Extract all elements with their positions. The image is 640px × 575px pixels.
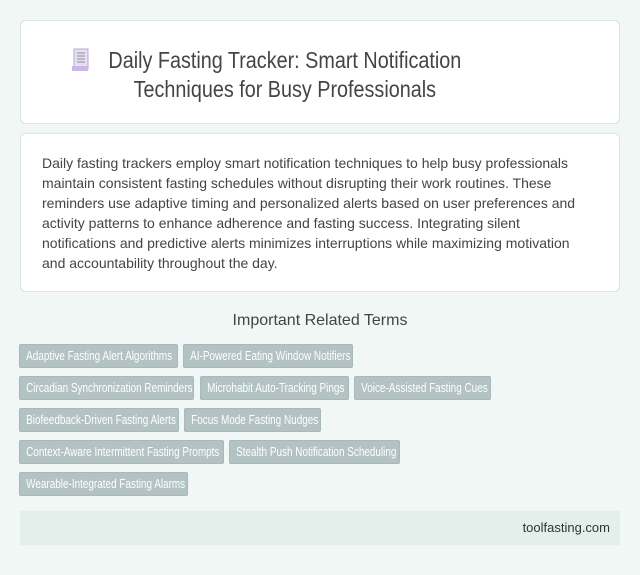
- tag: Circadian Synchronization Reminders: [26, 380, 193, 395]
- description text: notifications and predictive alerts minimizes interruptions while maximizing motivation: [42, 235, 570, 251]
- tag: [183, 344, 353, 368]
- header card: [20, 20, 620, 124]
- tag: Microhabit Auto-Tracking Pings: [207, 380, 344, 395]
- tag: [19, 440, 224, 464]
- title: Daily Fasting Tracker: Smart Notification: [108, 47, 461, 73]
- tag: [19, 344, 178, 368]
- footer text: toolfasting.com: [523, 520, 610, 535]
- icon: document: [72, 48, 88, 71]
- tag: [19, 408, 179, 432]
- tag: Biofeedback-Driven Fasting Alerts: [26, 412, 176, 427]
- description text: [42, 155, 575, 271]
- tag: [200, 376, 349, 400]
- description text: maintain consistent fasting schedules without disrupting their work routines. These: [42, 175, 551, 191]
- tag: Wearable-Integrated Fasting Alarms: [26, 476, 185, 491]
- description card: [20, 133, 620, 292]
- tag: Voice-Assisted Fasting Cues: [361, 380, 488, 395]
- tag: [19, 472, 188, 496]
- description text: activity patterns to enhance adherence and fasting success. Integrating silent: [42, 215, 520, 231]
- description text: reminders use adaptive timing and personalized alerts based on user preferences and: [42, 195, 575, 211]
- title: Techniques for Busy Professionals: [134, 76, 436, 102]
- tag: [229, 440, 400, 464]
- tag: Adaptive Fasting Alert Algorithms: [26, 348, 172, 363]
- footer: [20, 511, 620, 545]
- tag: AI-Powered Eating Window Notifiers: [190, 348, 350, 363]
- tag: [184, 408, 321, 432]
- section heading: Important Related Terms: [233, 312, 407, 329]
- tag: [354, 376, 491, 400]
- tag: Stealth Push Notification Scheduling: [236, 444, 396, 459]
- tag: Focus Mode Fasting Nudges: [191, 412, 318, 427]
- description text: and accountability throughout the day.: [42, 255, 278, 271]
- tag: Context-Aware Intermittent Fasting Prompts: [26, 444, 219, 459]
- tag: [19, 376, 194, 400]
- description text: Daily fasting trackers employ smart notification techniques to help busy professionals: [42, 155, 568, 171]
- title: [108, 47, 461, 102]
